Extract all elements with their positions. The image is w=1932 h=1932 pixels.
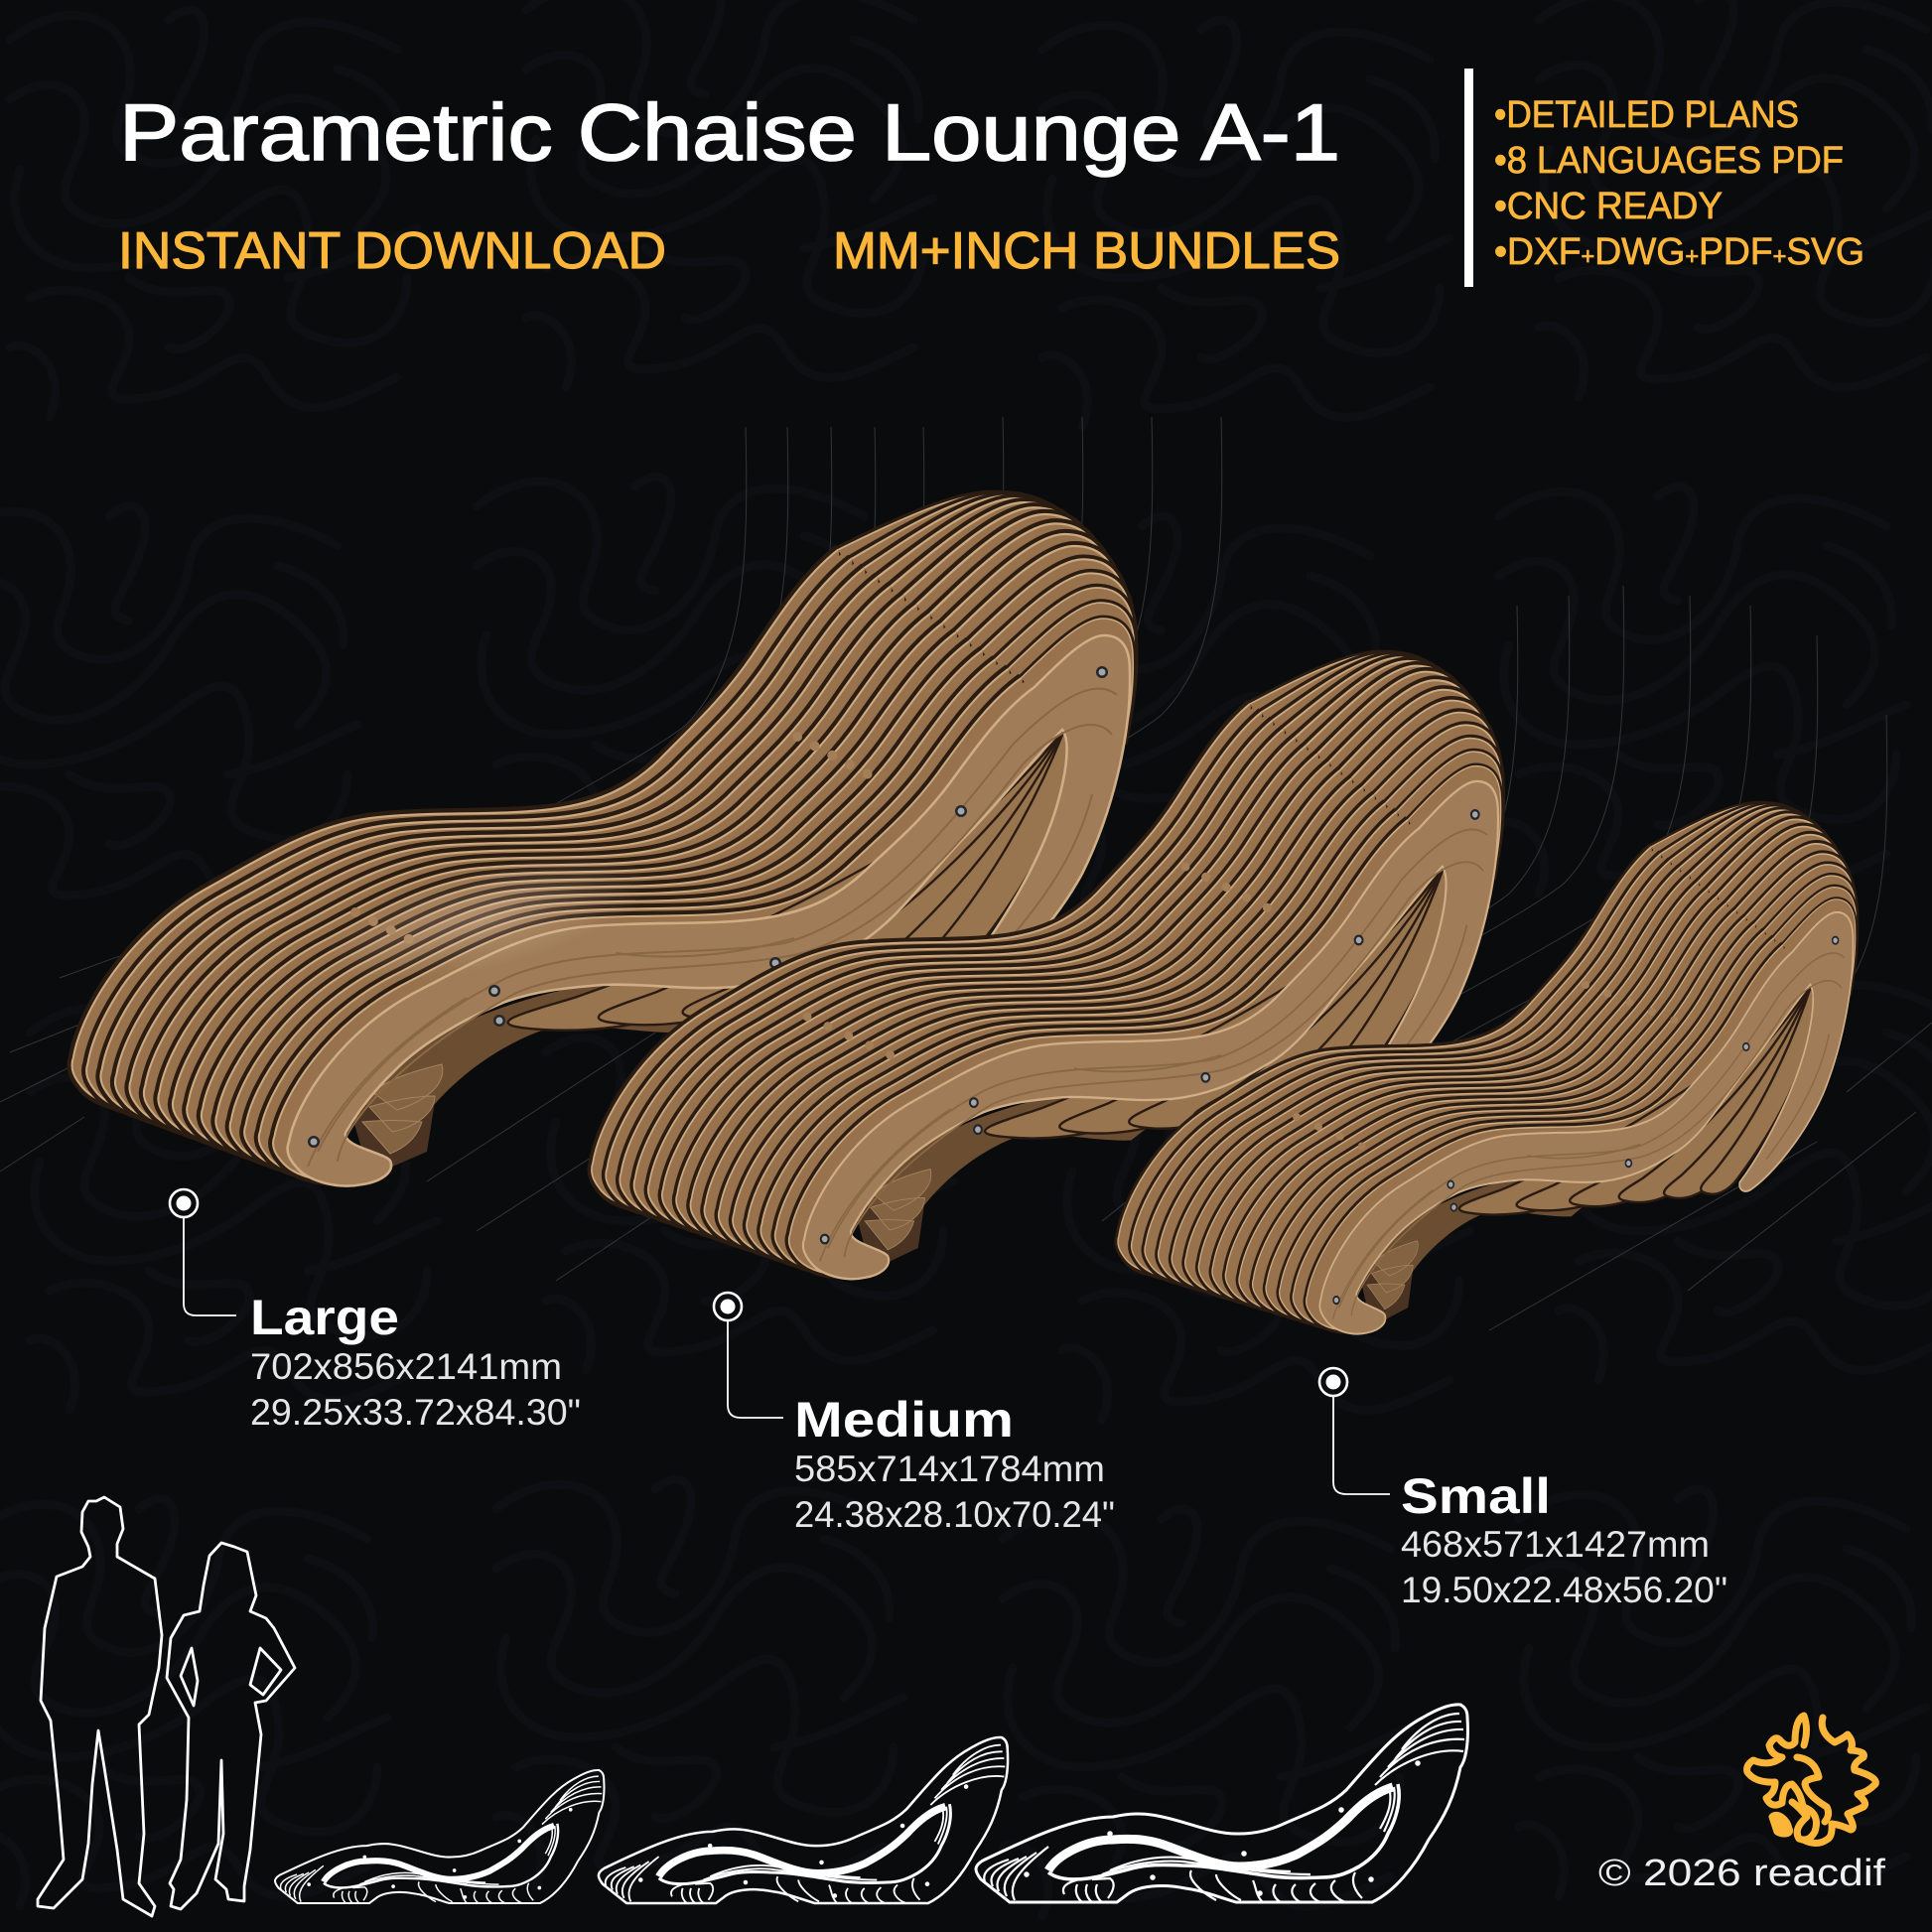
dimensions: small: 19.50x22.48x56.20" [1401, 1570, 1727, 1610]
slat joint ripples on medium chair [807, 867, 1275, 1057]
chair: small [1118, 803, 1857, 1334]
size name: medium: Medium [794, 1392, 1014, 1448]
dimensions: large: 702x856x2141mm [250, 1346, 562, 1387]
callout: large [170, 1189, 581, 1433]
marker and leader line: small [1319, 1368, 1390, 1494]
size name: large: Large [250, 1290, 399, 1345]
feature list: •DXF+DWG+PDF+SVG [1494, 231, 1864, 273]
chair: medium [592, 653, 1502, 1279]
size name: small: Small [1401, 1468, 1551, 1524]
plan drawing: medium [599, 1737, 1008, 1903]
subheading: mm + inch bundles: MM+INCH BUNDLES [833, 222, 1340, 280]
feature list: •8 LANGUAGES PDF [1494, 140, 1844, 182]
marker and leader line: large [170, 1189, 236, 1315]
dimensions: large: 29.25x33.72x84.30" [250, 1392, 581, 1433]
callout: medium [714, 1293, 1115, 1535]
dimensions: small [1401, 1524, 1727, 1610]
slat joint ripples on large chair [355, 737, 874, 941]
seat highlight on large chair [311, 829, 662, 1008]
feature list: •DETAILED PLANS [1494, 94, 1799, 136]
dimensions: medium: 585x714x1784mm [794, 1449, 1105, 1489]
feature list [1494, 94, 1864, 273]
logo: reacdif emblem [1747, 1716, 1875, 1843]
floor and wall hairlines [0, 417, 1932, 1330]
dimensions: medium: 24.38x28.10x70.24" [794, 1494, 1115, 1535]
icon: human silhouettes for scale [38, 1497, 295, 1916]
man outline [38, 1497, 162, 1916]
woman outline [167, 1543, 295, 1909]
plan drawing: small [275, 1770, 604, 1903]
dimensions: large [250, 1346, 581, 1433]
vertical divider bar [1464, 69, 1473, 287]
slat joint ripples on small chair [1297, 985, 1678, 1153]
marker and leader line: medium [714, 1293, 783, 1418]
dimensions: small: 468x571x1427mm [1401, 1524, 1710, 1565]
dimensions: medium [794, 1449, 1115, 1535]
title: Parametric Chaise Lounge A-1 [119, 88, 1340, 178]
feature list: •CNC READY [1494, 186, 1723, 227]
subheading: instant download: INSTANT DOWNLOAD [118, 222, 666, 280]
copyright: © 2026 reacdif [1598, 1853, 1886, 1894]
chair: large [71, 493, 1135, 1185]
callout: small [1319, 1368, 1727, 1610]
plan drawing: large [976, 1705, 1467, 1902]
